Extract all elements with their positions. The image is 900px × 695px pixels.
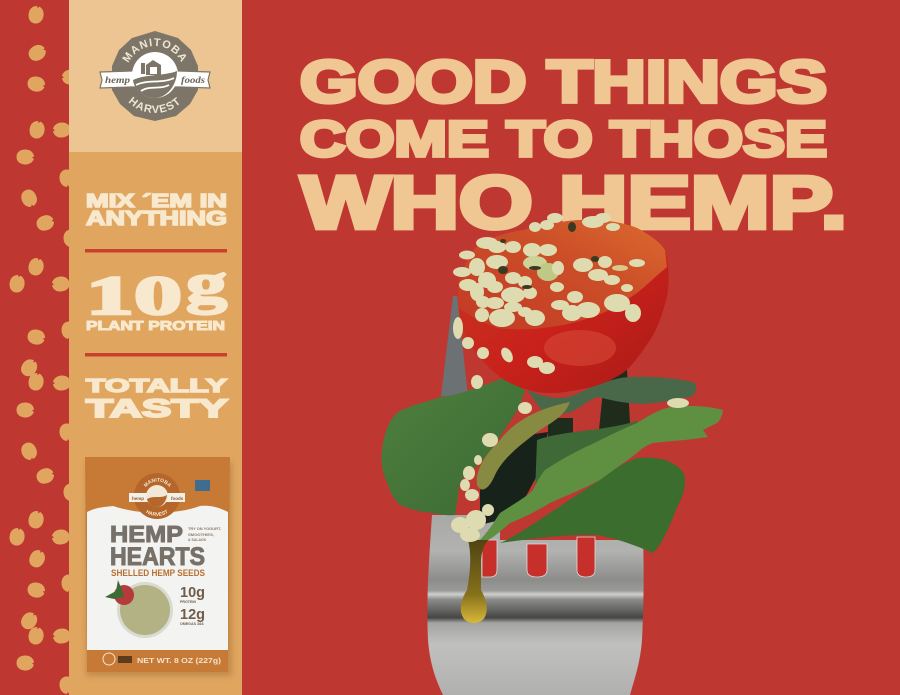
logo: Manitoba Harvest: foods: [181, 76, 205, 86]
leaf: left: [381, 378, 525, 515]
bag logo: HARVEST: [146, 510, 168, 516]
fork head: [427, 515, 644, 695]
product: hemp hearts bag: SHELLED HEMP SEEDS: [111, 568, 205, 579]
tomato: [458, 220, 669, 393]
leaf: bottom: [500, 458, 685, 553]
logo: Manitoba Harvest: [99, 31, 211, 121]
bag logo: MANITOBA: [144, 478, 171, 488]
benefit: mix 'em in anything: MIX ´EM IN: [86, 190, 227, 211]
product: hemp hearts bag: NET WT. 8 OZ (227g): [137, 656, 222, 665]
benefit: totally tasty: [86, 375, 229, 423]
product: hemp hearts bag: SMOOTHIES,: [188, 533, 214, 537]
product: hemp hearts bag: 10g: [180, 584, 205, 601]
headline: WHO HEMP.: [301, 161, 847, 244]
divider rule: [85, 249, 227, 252]
divider rule: [85, 353, 227, 356]
benefit: totally tasty: TOTALLY: [86, 375, 228, 396]
headline: GOOD THINGS: [300, 49, 827, 115]
benefit: totally tasty: TASTY: [86, 395, 229, 423]
benefit: 10g plant protein: g: [186, 253, 227, 315]
logo: Manitoba Harvest: MANITOBA: [122, 38, 186, 62]
leaf: bright stripe: [478, 406, 723, 545]
leaf: back band: [535, 421, 650, 495]
panel: logo background: [69, 0, 242, 152]
product: hemp hearts bag: OMEGAS 3&6: [180, 622, 204, 626]
product: hemp hearts bag: TRY ON YOGURT,: [188, 527, 221, 531]
product: hemp hearts bag: HEARTS: [110, 543, 205, 571]
illustration: fork with salad: [381, 213, 723, 695]
product: hemp hearts bag: PROTEIN: [180, 600, 196, 604]
benefit: 10g plant protein: 10: [86, 265, 182, 326]
benefit: 10g plant protein: PLANT PROTEIN: [86, 318, 225, 333]
product: hemp hearts bag: & SALADS: [188, 538, 207, 542]
leaf: top right: [527, 377, 696, 414]
hemp seeds on tomato: [451, 213, 689, 542]
fork tines: [441, 296, 631, 448]
seed specks: [498, 222, 599, 289]
bag logo: hemp: [132, 496, 144, 501]
bag badge: [195, 480, 210, 491]
oil drip: [461, 540, 488, 623]
bag logo: foods: [171, 496, 184, 501]
logo: Manitoba Harvest: hemp: [105, 76, 130, 86]
benefit: mix 'em in anything: ANYTHING: [86, 208, 227, 230]
bag logo: [129, 473, 185, 519]
dark interior: [480, 432, 548, 525]
product: hemp hearts bag: HEMP: [110, 521, 183, 547]
logo: Manitoba Harvest: HARVEST: [128, 96, 179, 113]
seed pattern strip: [8, 4, 79, 695]
spinach leaves: [381, 377, 723, 553]
headline: [300, 49, 847, 244]
product: hemp hearts bag: [84, 457, 234, 678]
benefit: 10g plant protein: [86, 253, 227, 333]
panel: benefits column: [69, 152, 242, 695]
headline: COME TO THOSE: [300, 111, 827, 167]
product: hemp hearts bag: 12g: [180, 606, 205, 623]
benefit: mix 'em in anything: [86, 190, 227, 230]
oil streak: [477, 402, 570, 490]
